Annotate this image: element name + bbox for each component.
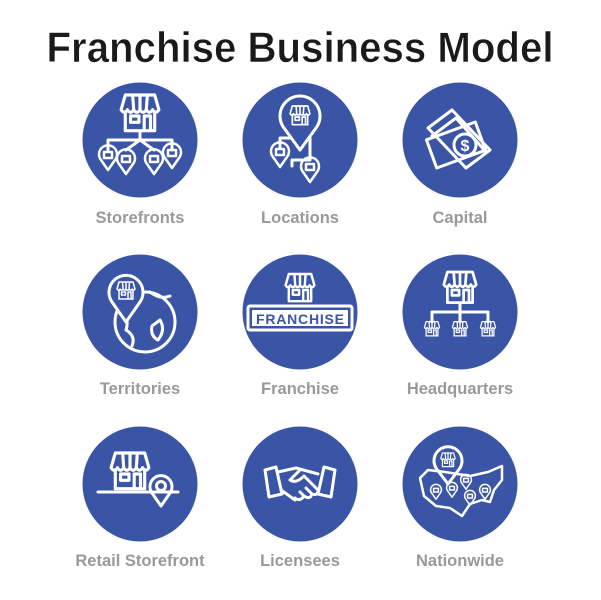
panel: territories: [82, 254, 198, 398]
panel: franchise: [242, 254, 358, 398]
panel: territories: Territories: [100, 380, 180, 398]
panel: licensees: [242, 426, 358, 570]
panel: capital: $: [461, 138, 470, 155]
panel: retail storefront: [75, 426, 205, 570]
panel: nationwide: [402, 426, 518, 570]
panel: storefronts: [82, 82, 198, 227]
panel: capital: [402, 82, 518, 227]
panel: franchise: Franchise: [261, 380, 339, 398]
panel: locations: Locations: [261, 209, 339, 227]
panel: retail storefront: Retail Storefront: [75, 552, 205, 570]
panel: locations: [242, 82, 358, 227]
panel: headquarters: [402, 254, 518, 398]
panel: nationwide: Nationwide: [416, 552, 504, 570]
panel: licensees: Licensees: [260, 552, 340, 570]
panel: storefronts: Storefronts: [96, 209, 184, 227]
panel: capital: Capital: [432, 209, 488, 227]
panel: franchise: FRANCHISE: [256, 311, 344, 327]
title: Franchise Business Model: [46, 24, 554, 72]
panel: headquarters: Headquarters: [407, 380, 513, 398]
